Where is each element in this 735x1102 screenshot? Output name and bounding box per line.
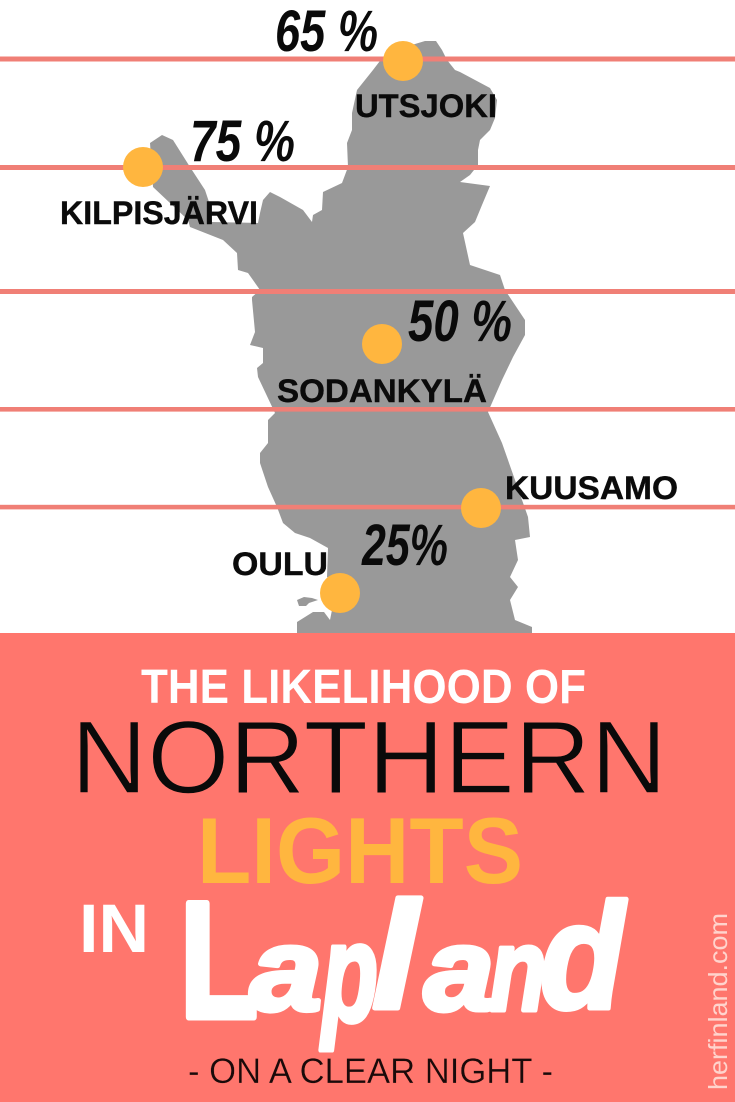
heading: the likelihood of: THE LIKELIHOOD OF [141, 661, 586, 714]
heading: Lapland script: L [180, 868, 258, 1052]
heading: in: IN [79, 890, 149, 967]
marker: Utsjoki [383, 41, 423, 81]
label: Kuusamo: KUUSAMO [505, 470, 678, 506]
marker: Oulu [320, 573, 360, 613]
heading: Lapland script: l [372, 871, 421, 1041]
marker: Kilpisjärvi [123, 147, 163, 187]
marker: Kuusamo [461, 488, 501, 528]
marker: Sodankylä [362, 324, 402, 364]
heading: Lapland script: a [250, 904, 322, 1035]
heading: Lapland script [180, 868, 627, 1052]
heading: lights: LIGHTS [197, 798, 523, 903]
label: Sodankylä: SODANKYLÄ [277, 373, 487, 409]
map of Lapland [150, 41, 532, 633]
heading: northern: NORTHERN [71, 700, 667, 816]
percentage: 65: 65 % [275, 0, 378, 64]
percentage: 25: 25% [361, 513, 448, 578]
label: Kilpisjärvi: KILPISJÄRVI [60, 195, 258, 231]
website credit: herfinland.com [703, 913, 733, 1090]
subtitle: - ON A CLEAR NIGHT - [188, 1052, 553, 1091]
latitude lines [0, 56, 735, 509]
heading: Lapland script: p [319, 894, 378, 1051]
title panel [0, 633, 735, 1102]
heading: Lapland script: a [424, 904, 494, 1035]
heading: Lapland script: d [540, 872, 627, 1040]
percentage: 50: 50 % [408, 289, 512, 354]
label: Oulu: OULU [232, 546, 328, 582]
heading: Lapland script: n [490, 904, 546, 1035]
percentage: 75: 75 % [190, 109, 295, 174]
label: Utsjoki: UTSJOKI [355, 88, 497, 124]
